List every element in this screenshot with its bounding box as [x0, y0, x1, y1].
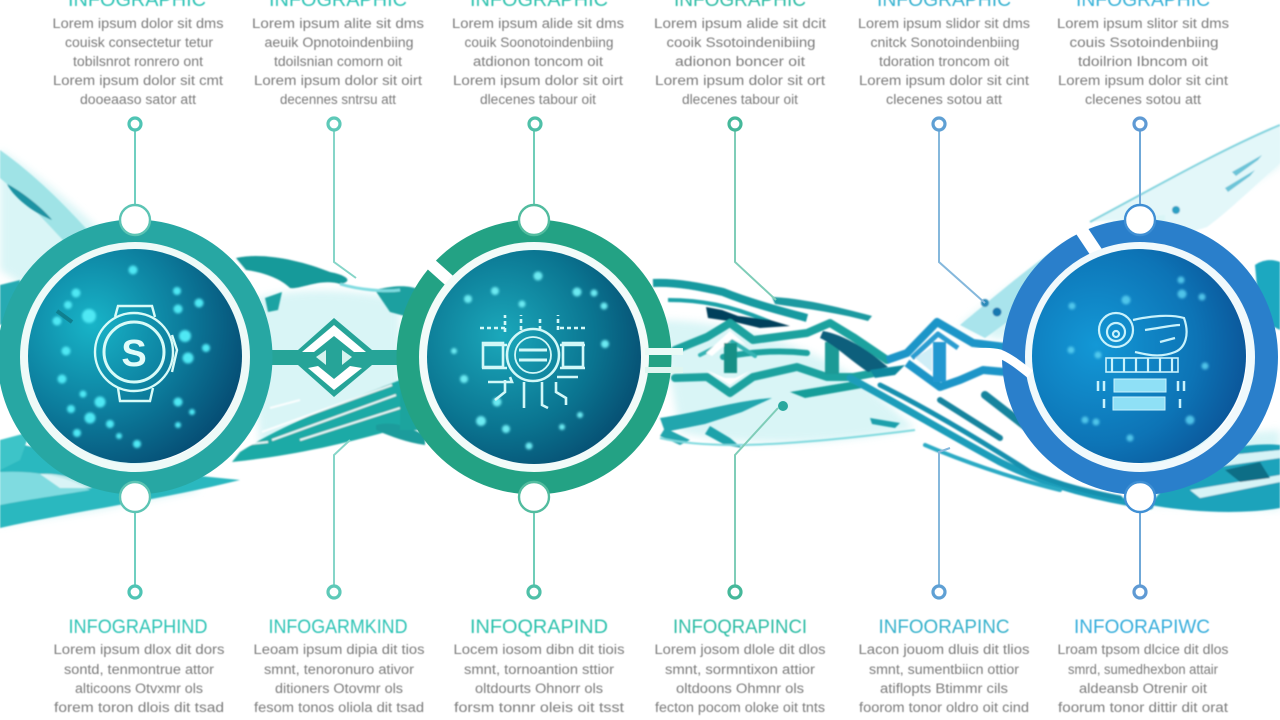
column 5 bottom: smnt, sumentbiicn ottior [869, 662, 1020, 677]
column 6 bottom: INFOORAPIWC [1074, 617, 1210, 638]
column 6 bottom: aldeansb Otrenir oit [1079, 681, 1207, 696]
ring nodes [120, 205, 1155, 512]
top pins [129, 118, 1146, 130]
connector lines [135, 130, 1140, 586]
column 4 bottom: fecton pocom oloke oit tnts [655, 700, 825, 715]
column 1 bottom: Lorem ipsum dlox dit dors [54, 642, 225, 657]
column 5 bottom: INFOORAPINC [878, 617, 1010, 638]
column 1 top [52, 0, 224, 107]
column 1 top: tobilsnrot ronrero ont [73, 54, 203, 69]
column 6 top: tdoilrion Ibncom oit [1078, 54, 1208, 69]
bottom pins [129, 586, 1146, 598]
column 2 top: tdoilsnian comorn oit [274, 54, 402, 69]
column 1 top: Lorem ipsum dolor sit cmt [53, 73, 223, 88]
column 3 bottom: oltdourts Ohnorr ols [475, 681, 603, 696]
small junction dot [778, 401, 788, 411]
column 5 top: clecenes sotou att [886, 92, 1002, 107]
column 1 top: couisk consectetur tetur [65, 35, 214, 50]
particles [451, 272, 609, 450]
column 5 bottom [858, 617, 1030, 715]
column 6 top: Lorem ipsum slitor sit dms [1057, 16, 1229, 31]
column 2 bottom: Leoam ipsum dipia dit tios [254, 642, 425, 657]
right side [1255, 260, 1280, 330]
column 2 top: decennes sntrsu att [280, 92, 396, 107]
water stream [0, 125, 1280, 528]
column 4 top: Lorem ipsum alide sit dcit [654, 16, 826, 31]
column 6 top [1057, 0, 1229, 107]
middle to right upper stream [653, 283, 807, 318]
node 1: teal circle [9, 231, 261, 483]
waves through second connector [675, 323, 887, 393]
column 4 top [654, 0, 826, 107]
column 3 top: couik Soonotoindenbiing [464, 35, 614, 50]
column 1 bottom: INFOGRAPHIND [68, 617, 208, 638]
column 5 bottom: atiflopts Btimmr cils [880, 681, 1008, 696]
column 4 top: adionon boncer oit [675, 54, 805, 69]
column 2 bottom [254, 617, 425, 715]
column 1 bottom: forem toron dlois dit tsad [54, 700, 224, 715]
column 6 top: Lorem ipsum dolor sit cint [1058, 73, 1228, 88]
column 3 bottom: INFOQRAPIND [470, 617, 608, 638]
column 4 bottom: smnt, sormntixon attior [665, 662, 816, 677]
column 6 bottom [1058, 617, 1229, 715]
column 4 bottom: Lorem josom dlole dit dlos [654, 642, 826, 657]
column 6 bottom: smrd, sumedhexbon attair [1068, 662, 1218, 677]
column 3 bottom: forsm tonnr oleis oit tsst [454, 700, 624, 715]
column 4 top: cooik Ssotoindenibiing [666, 35, 816, 50]
column 5 bottom: Lacon jouom dluis dit tlios [858, 642, 1030, 657]
streaks below first connector [232, 380, 410, 462]
node 2: green circle [408, 231, 683, 483]
column 6 top: couis Ssotoindenbiing [1070, 35, 1218, 50]
column 2 bottom: ditioners Otovmr ols [275, 681, 403, 696]
lower streaks middle [660, 398, 772, 432]
column 3 bottom: smnt, tornoantion sttior [464, 662, 615, 677]
particles [52, 266, 210, 448]
column 4 bottom: oltdoons Ohmnr ols [676, 681, 804, 696]
column 2 top: Lorem ipsum dolor sit oirt [254, 73, 422, 88]
column 3 top: Lorem ipsum dolor sit oirt [453, 73, 623, 88]
particles [1068, 276, 1208, 442]
column 6 bottom: Lroam tpsom dlcice dit dlos [1058, 642, 1229, 657]
column 2 bottom: smnt, tenoronuro ativor [264, 662, 415, 677]
main diagonal to the lower right [850, 378, 1150, 506]
column 6 top: clecenes sotou att [1085, 92, 1201, 107]
icon: circuit globe [480, 315, 585, 408]
column 5 top: tdoration troncom oit [879, 54, 1009, 69]
column 6 bottom: foorum tonor dittir dit orat [1058, 700, 1228, 715]
column 2 bottom: fesom tonos oliola dit tsad [254, 700, 424, 715]
bottom text blocks [54, 617, 1229, 715]
icon: S coin watch [95, 306, 177, 401]
first connector: diamond link [270, 318, 400, 397]
right blue connector wave [887, 322, 1005, 387]
column 2 bottom: INFOGARMKIND [268, 617, 408, 638]
column 2 top [252, 0, 424, 107]
column 5 top: Lorem ipsum slidor sit dms [858, 16, 1030, 31]
column 5 bottom: foorom tonor oldro oit cind [859, 700, 1029, 715]
column 3 bottom [454, 617, 625, 715]
column 3 top: Lorem ipsum alide sit dms [452, 16, 624, 31]
column 1 top: dooeaaso sator att [80, 92, 196, 107]
column 2 top: Lorem ipsum alite sit dms [252, 16, 424, 31]
column 2 top: aeuik Opnotoindenbiing [264, 35, 414, 50]
column 1 bottom: sontd, tenmontrue attor [64, 662, 215, 677]
left bottom stream [0, 440, 240, 528]
column 5 top: Lorem ipsum dolor sit cint [859, 73, 1029, 88]
icon: S coin watch: S [121, 333, 147, 375]
splash above first connector [236, 256, 347, 288]
column 3 top: atdionon toncom oit [473, 54, 603, 69]
column 1 top: Lorem ipsum dolor sit dms [52, 16, 224, 31]
top text blocks [52, 0, 1229, 107]
left top splash streak [0, 150, 92, 248]
upper right ribbon [1090, 125, 1280, 240]
column 4 top: dlecenes tabour oit [682, 92, 798, 107]
column 4 bottom [654, 617, 826, 715]
column 3 bottom: Locem iosom dibn dit tiois [454, 642, 625, 657]
column 5 top [858, 0, 1030, 107]
column 3 top [452, 0, 624, 107]
icon: ionic column capital [1098, 313, 1187, 410]
column 1 bottom [54, 617, 225, 715]
column 5 top: cnitck Sonotoindenbiing [870, 35, 1020, 50]
column 4 bottom: INFOQRAPINCI [673, 617, 807, 638]
column 4 top: Lorem ipsum dolor sit ort [655, 73, 825, 88]
column 3 top: dlecenes tabour oit [480, 92, 596, 107]
node 3: blue circle [948, 228, 1266, 483]
column 1 bottom: alticoons Otvxmr ols [75, 681, 203, 696]
